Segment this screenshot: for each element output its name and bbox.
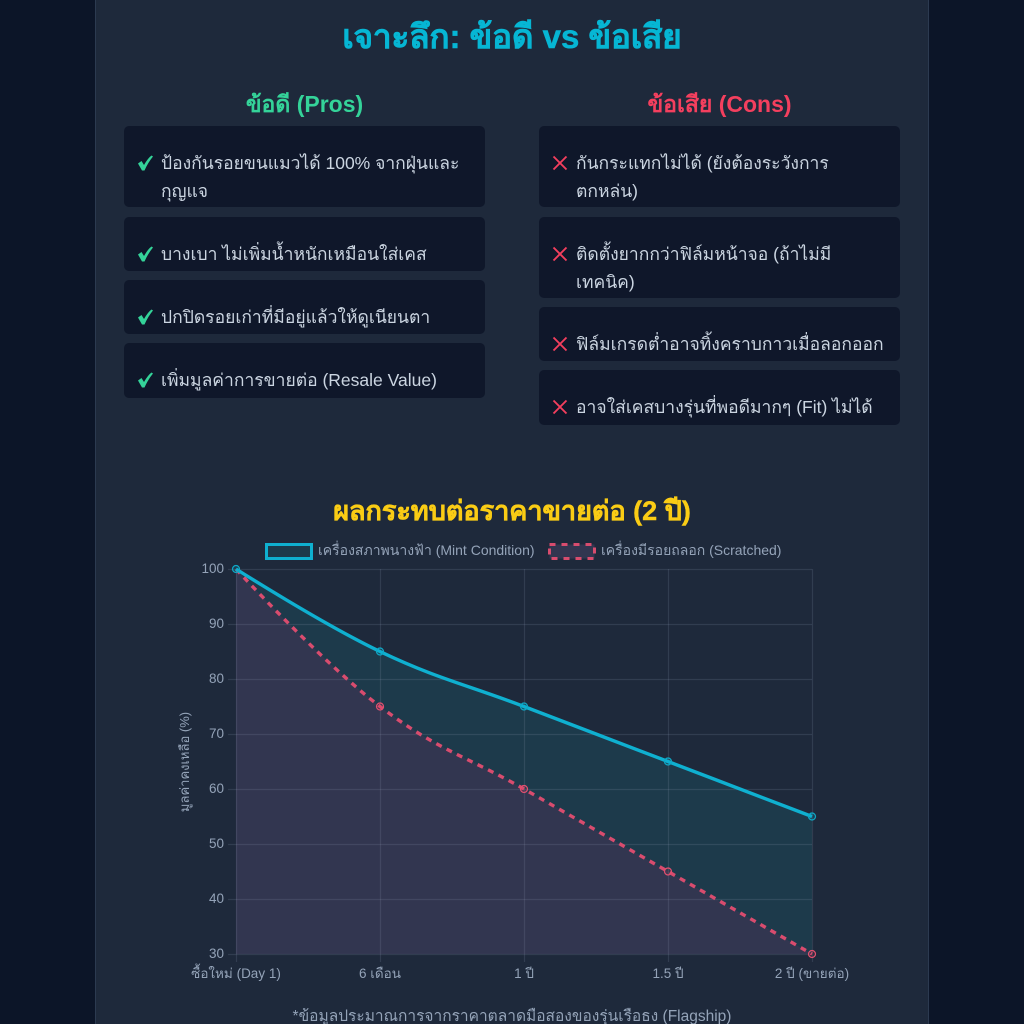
area: mint condition bbox=[236, 569, 812, 954]
pro item 4: เพิ่มมูลค่าการขายต่อ (Resale Value) bbox=[161, 370, 437, 390]
pro item 2: บางเบา ไม่เพิ่มน้ำหนักเหมือนใส่เคส bbox=[161, 244, 427, 264]
y axis labels: 70 bbox=[209, 726, 224, 741]
con item 2: ติดตั้งยากกว่าฟิล์มหน้าจอ (ถ้าไม่มี bbox=[576, 244, 831, 264]
y axis labels: 40 bbox=[209, 891, 224, 906]
y axis labels: 30 bbox=[209, 946, 224, 961]
x axis labels: 2 ปี (ขายต่อ) bbox=[775, 966, 849, 981]
y axis labels: 100 bbox=[201, 561, 224, 576]
x axis labels: 6 เดือน bbox=[359, 966, 401, 981]
y axis labels: 90 bbox=[209, 616, 224, 631]
pro item 4 bbox=[124, 343, 485, 398]
legend bbox=[266, 541, 781, 558]
pro item 1: กุญแจ bbox=[161, 181, 208, 201]
chart gridlines bbox=[228, 569, 812, 962]
line: scratched bbox=[236, 569, 816, 958]
y axis labels: 50 bbox=[209, 836, 224, 851]
x axis labels bbox=[191, 963, 849, 981]
heading: cons: ข้อเสีย (Cons) bbox=[647, 91, 792, 117]
panel: cons list bbox=[539, 126, 900, 425]
chart heading: ผลกระทบต่อราคาขายต่อ (2 ปี) bbox=[333, 496, 691, 526]
y axis title: มูลค่าคงเหลือ (%) bbox=[177, 712, 193, 812]
con item 1: กันกระแทกไม่ได้ (ยังต้องระวังการ bbox=[576, 153, 829, 173]
x axis labels: 1 ปี bbox=[514, 966, 534, 981]
y axis labels: 60 bbox=[209, 781, 224, 796]
con item 1: ตกหล่น) bbox=[576, 181, 638, 201]
title: เจาะลึก: ข้อดี vs ข้อเสีย bbox=[342, 18, 682, 55]
pro item 1: ป้องกันรอยขนแมวได้ 100% จากฝุ่นและ bbox=[161, 153, 459, 173]
pro item 2 bbox=[124, 217, 485, 271]
legend: เครื่องมีรอยถลอก (Scratched) bbox=[601, 541, 781, 558]
y axis labels bbox=[201, 561, 224, 961]
con item 3 bbox=[539, 307, 900, 361]
pro item 3: ปกปิดรอยเก่าที่มีอยู่แล้วให้ดูเนียนตา bbox=[161, 307, 430, 327]
con item 4: อาจใส่เคสบางรุ่นที่พอดีมากๆ (Fit) ไม่ได้ bbox=[576, 397, 873, 417]
con item 2: เทคนิค) bbox=[576, 272, 635, 292]
x axis labels: 1.5 ปี bbox=[652, 966, 684, 981]
con item 2 bbox=[539, 217, 900, 298]
panel: pros list bbox=[124, 126, 485, 398]
heading: pros: ข้อดี (Pros) bbox=[246, 91, 363, 117]
legend: เครื่องสภาพนางฟ้า (Mint Condition) bbox=[318, 541, 535, 558]
pro item 1 bbox=[124, 126, 485, 207]
con item 4 bbox=[539, 370, 900, 425]
con item 3: ฟิล์มเกรดต่ำอาจทิ้งคราบกาวเมื่อลอกออก bbox=[576, 334, 884, 354]
pro item 3 bbox=[124, 280, 485, 334]
x axis labels: ซื้อใหม่ (Day 1) bbox=[191, 963, 281, 981]
con item 1 bbox=[539, 126, 900, 207]
y axis labels: 80 bbox=[209, 671, 224, 686]
line: mint condition bbox=[232, 566, 816, 820]
area: scratched bbox=[236, 569, 812, 954]
